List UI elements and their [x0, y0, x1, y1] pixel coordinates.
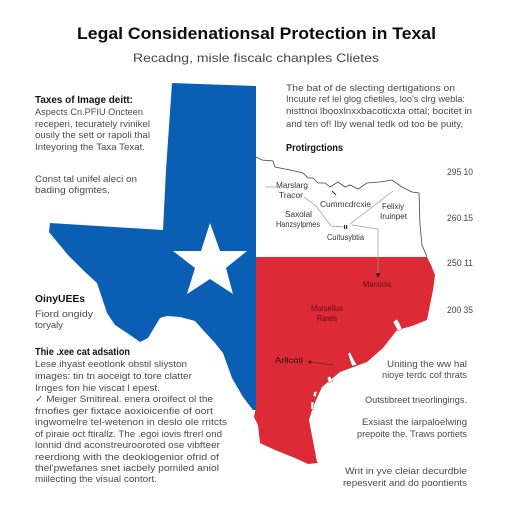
text block: note: Const tal unifel aleci on — [35, 174, 137, 185]
icon: white star — [173, 223, 247, 294]
marker: map node — [344, 225, 347, 229]
map labels: Marxicla — [363, 280, 392, 289]
text block: adoption: of piraie oct ftirallz. The .egoi iovis ftrerl ond — [35, 429, 222, 440]
text block: top right intro: and ten of! Iby wenal tedk od too be puity, — [286, 119, 463, 130]
map: Texas flag shape — [49, 83, 435, 464]
heading: projections: Protirgctions — [286, 143, 343, 154]
arrow: to Marxicla — [376, 273, 380, 278]
title: Legal Considenationsal Protection in Texal — [77, 24, 436, 43]
map border: northern river line — [256, 157, 427, 257]
text block: top right intro: nisttnoi lbooxlnxxbacoticxta ottal; bocitet in — [286, 106, 472, 117]
text block: image details: receperi, tecurately rvinikel — [35, 119, 150, 130]
map labels: Saxolal — [285, 210, 312, 219]
text block: bottom right notes: Uniting the ww hal — [387, 359, 467, 370]
date labels: 295 10 — [447, 167, 473, 178]
map labels: Marslarg — [276, 181, 308, 190]
date labels — [447, 167, 473, 316]
map labels: Arlicoti — [275, 356, 303, 365]
text block: image details: Aspects Cn.PFIU Oncteen — [35, 107, 143, 118]
map region: blue left half — [49, 83, 256, 410]
date labels: 260 15 — [447, 213, 473, 224]
text block: bottom right notes: Exsiast the iarpaloelwing — [362, 417, 467, 428]
text block: adoption — [35, 347, 227, 485]
map region: red lower half — [254, 257, 435, 464]
text block: image details: ousily the sett or rapoli thal — [35, 130, 150, 141]
text block: top right intro — [286, 83, 472, 130]
text block: outputs: OinyUEEs — [35, 294, 85, 305]
text block: bottom right notes: Writ in yve cleiar decurdble — [345, 466, 467, 477]
text block: bottom right notes: nioye terdc cof thrats — [382, 370, 467, 381]
text block: outputs: toryaly — [35, 320, 63, 331]
map labels: Cummcdrcxie — [320, 200, 372, 209]
map labels: Iruinpet — [380, 212, 408, 221]
text block: adoption: ✓ Meiger Smitireal. enera oroifect ol the — [35, 394, 213, 405]
map detail: barrier island stripe — [311, 425, 318, 462]
text block: image details — [35, 95, 150, 153]
text block: adoption: frnofies ger fixtace aoxioicenfie of oort — [35, 406, 213, 417]
text block: adoption: Lese ihyast eeotlonk obstil sliyston — [35, 359, 187, 370]
map detail: white bay inlets on the coast — [311, 319, 402, 410]
map labels — [275, 181, 408, 365]
text block: adoption: Irnges fon hie viscat l epest. — [35, 383, 160, 394]
map labels: Tracor — [279, 191, 303, 200]
map labels: Marsellus — [311, 304, 343, 313]
text block: image details: Taxes of Image deitt: — [35, 95, 133, 106]
map labels: Rareis — [317, 314, 337, 323]
text block: note — [35, 174, 137, 196]
text block: adoption: ingwomelre tel-wetenon in deslo ole rritcts — [35, 417, 227, 428]
text block: adoption: miilecting the visual contort. — [35, 474, 157, 485]
map labels: Hanzsylpmes — [276, 220, 320, 229]
text block: adoption: Thie .xee cat adsation — [35, 347, 130, 358]
date labels: 250 11 — [447, 258, 473, 269]
text block: top right intro: The bat of de slecting dertigations on — [286, 83, 455, 94]
text block: adoption: lonnid dnd aconstreurooroted ose vibfteer — [35, 440, 220, 451]
subtitle: Recadng, misle fiscalc chanples Clietes — [133, 51, 379, 65]
text block: top right intro: Incuute ref lel glog cfietiles, loo's clrg webla: — [286, 94, 465, 105]
map connector lines — [265, 187, 393, 275]
text block: adoption: reerdiong with the deokiogenior ofrid of — [35, 452, 219, 463]
text block: bottom right notes — [343, 359, 467, 489]
text block: image details: Inteyoring the Taxa Texat. — [35, 142, 145, 153]
map labels: Felixiy — [382, 202, 404, 211]
arrow: Arlicoti pointer — [309, 361, 333, 365]
marker: river arrow — [332, 191, 336, 195]
text block: bottom right notes: repesverit and do poontients — [343, 478, 467, 489]
text block: bottom right notes: prepoite the. Traws portiets — [357, 429, 467, 440]
text block: outputs — [35, 294, 93, 331]
text block: adoption: images: tin tn aoceigt to tore clatter — [35, 371, 192, 382]
text block: outputs: Fiord ongidy — [35, 309, 93, 320]
text block: adoption: thel'pwefanes snet iacbely pomiled aniol — [35, 463, 219, 474]
text block: note: bading ofigmtes. — [35, 185, 110, 196]
date labels: 200 35 — [447, 305, 473, 316]
text block: bottom right notes: Outstibreet tneorlingings. — [365, 395, 467, 406]
map labels: Cuitusybtia — [327, 233, 365, 242]
